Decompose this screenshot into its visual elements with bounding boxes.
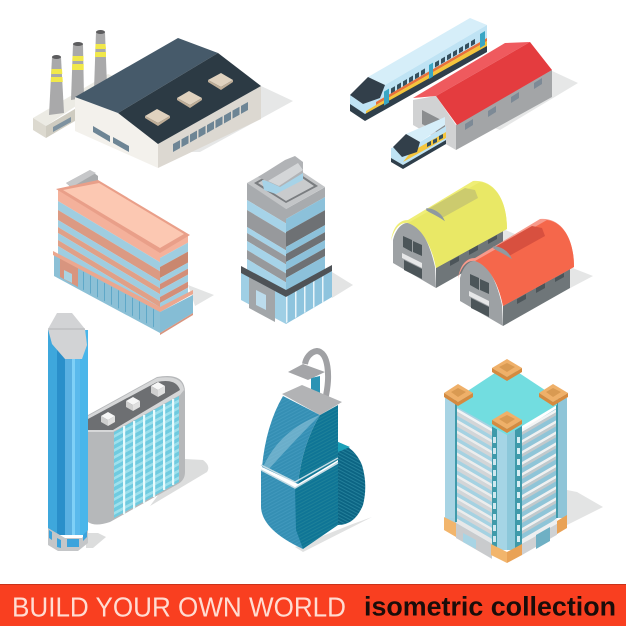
wall xyxy=(393,223,503,288)
roof xyxy=(247,161,325,209)
ground floor xyxy=(53,251,193,335)
gray tower xyxy=(241,156,353,324)
base xyxy=(241,265,332,324)
roof caps xyxy=(444,359,568,433)
roof xyxy=(391,181,507,268)
chimney base xyxy=(33,74,118,138)
train long xyxy=(350,18,487,121)
curved-corner office xyxy=(88,376,208,524)
factory roof xyxy=(75,38,261,144)
vent xyxy=(66,170,98,193)
rooftop vent xyxy=(258,156,303,194)
shed roof xyxy=(413,42,552,125)
orange base xyxy=(444,515,567,563)
upper left body xyxy=(262,396,320,484)
stripes xyxy=(48,330,88,535)
right facade bands xyxy=(160,235,188,312)
train short xyxy=(391,117,446,169)
rear lobe xyxy=(338,442,365,525)
facade right xyxy=(286,187,325,292)
wall xyxy=(460,261,570,326)
factory walls xyxy=(75,86,261,168)
red hangar xyxy=(458,219,593,326)
platforms and arch xyxy=(282,351,342,415)
teal residential tower xyxy=(444,359,603,563)
walls xyxy=(88,376,185,524)
pink office building xyxy=(53,170,214,335)
lower right body xyxy=(295,462,338,549)
upper right body xyxy=(298,405,338,484)
train depot xyxy=(350,18,578,169)
banner text: build your own world: BUILD YOUR OWN WORLD xyxy=(12,592,346,622)
banner xyxy=(0,584,626,626)
curved glass tower xyxy=(261,351,372,552)
right face xyxy=(522,398,567,555)
facade left xyxy=(247,183,286,294)
shed walls xyxy=(413,70,552,150)
base xyxy=(48,528,88,551)
lower left body xyxy=(261,470,303,549)
factory xyxy=(33,30,293,168)
roof xyxy=(457,365,557,435)
front pillar xyxy=(492,425,522,550)
pink roof xyxy=(56,180,190,253)
glass face xyxy=(114,396,179,518)
roof xyxy=(458,219,574,306)
left face xyxy=(445,393,492,559)
top cap xyxy=(48,313,87,359)
banner text: isometric collection: isometric collection xyxy=(364,592,616,622)
yellow hangar xyxy=(391,181,515,288)
roof cubes xyxy=(101,382,165,426)
white band xyxy=(261,458,338,488)
blue tower xyxy=(48,313,106,551)
left facade bands xyxy=(58,189,160,319)
chimneys xyxy=(49,30,107,115)
